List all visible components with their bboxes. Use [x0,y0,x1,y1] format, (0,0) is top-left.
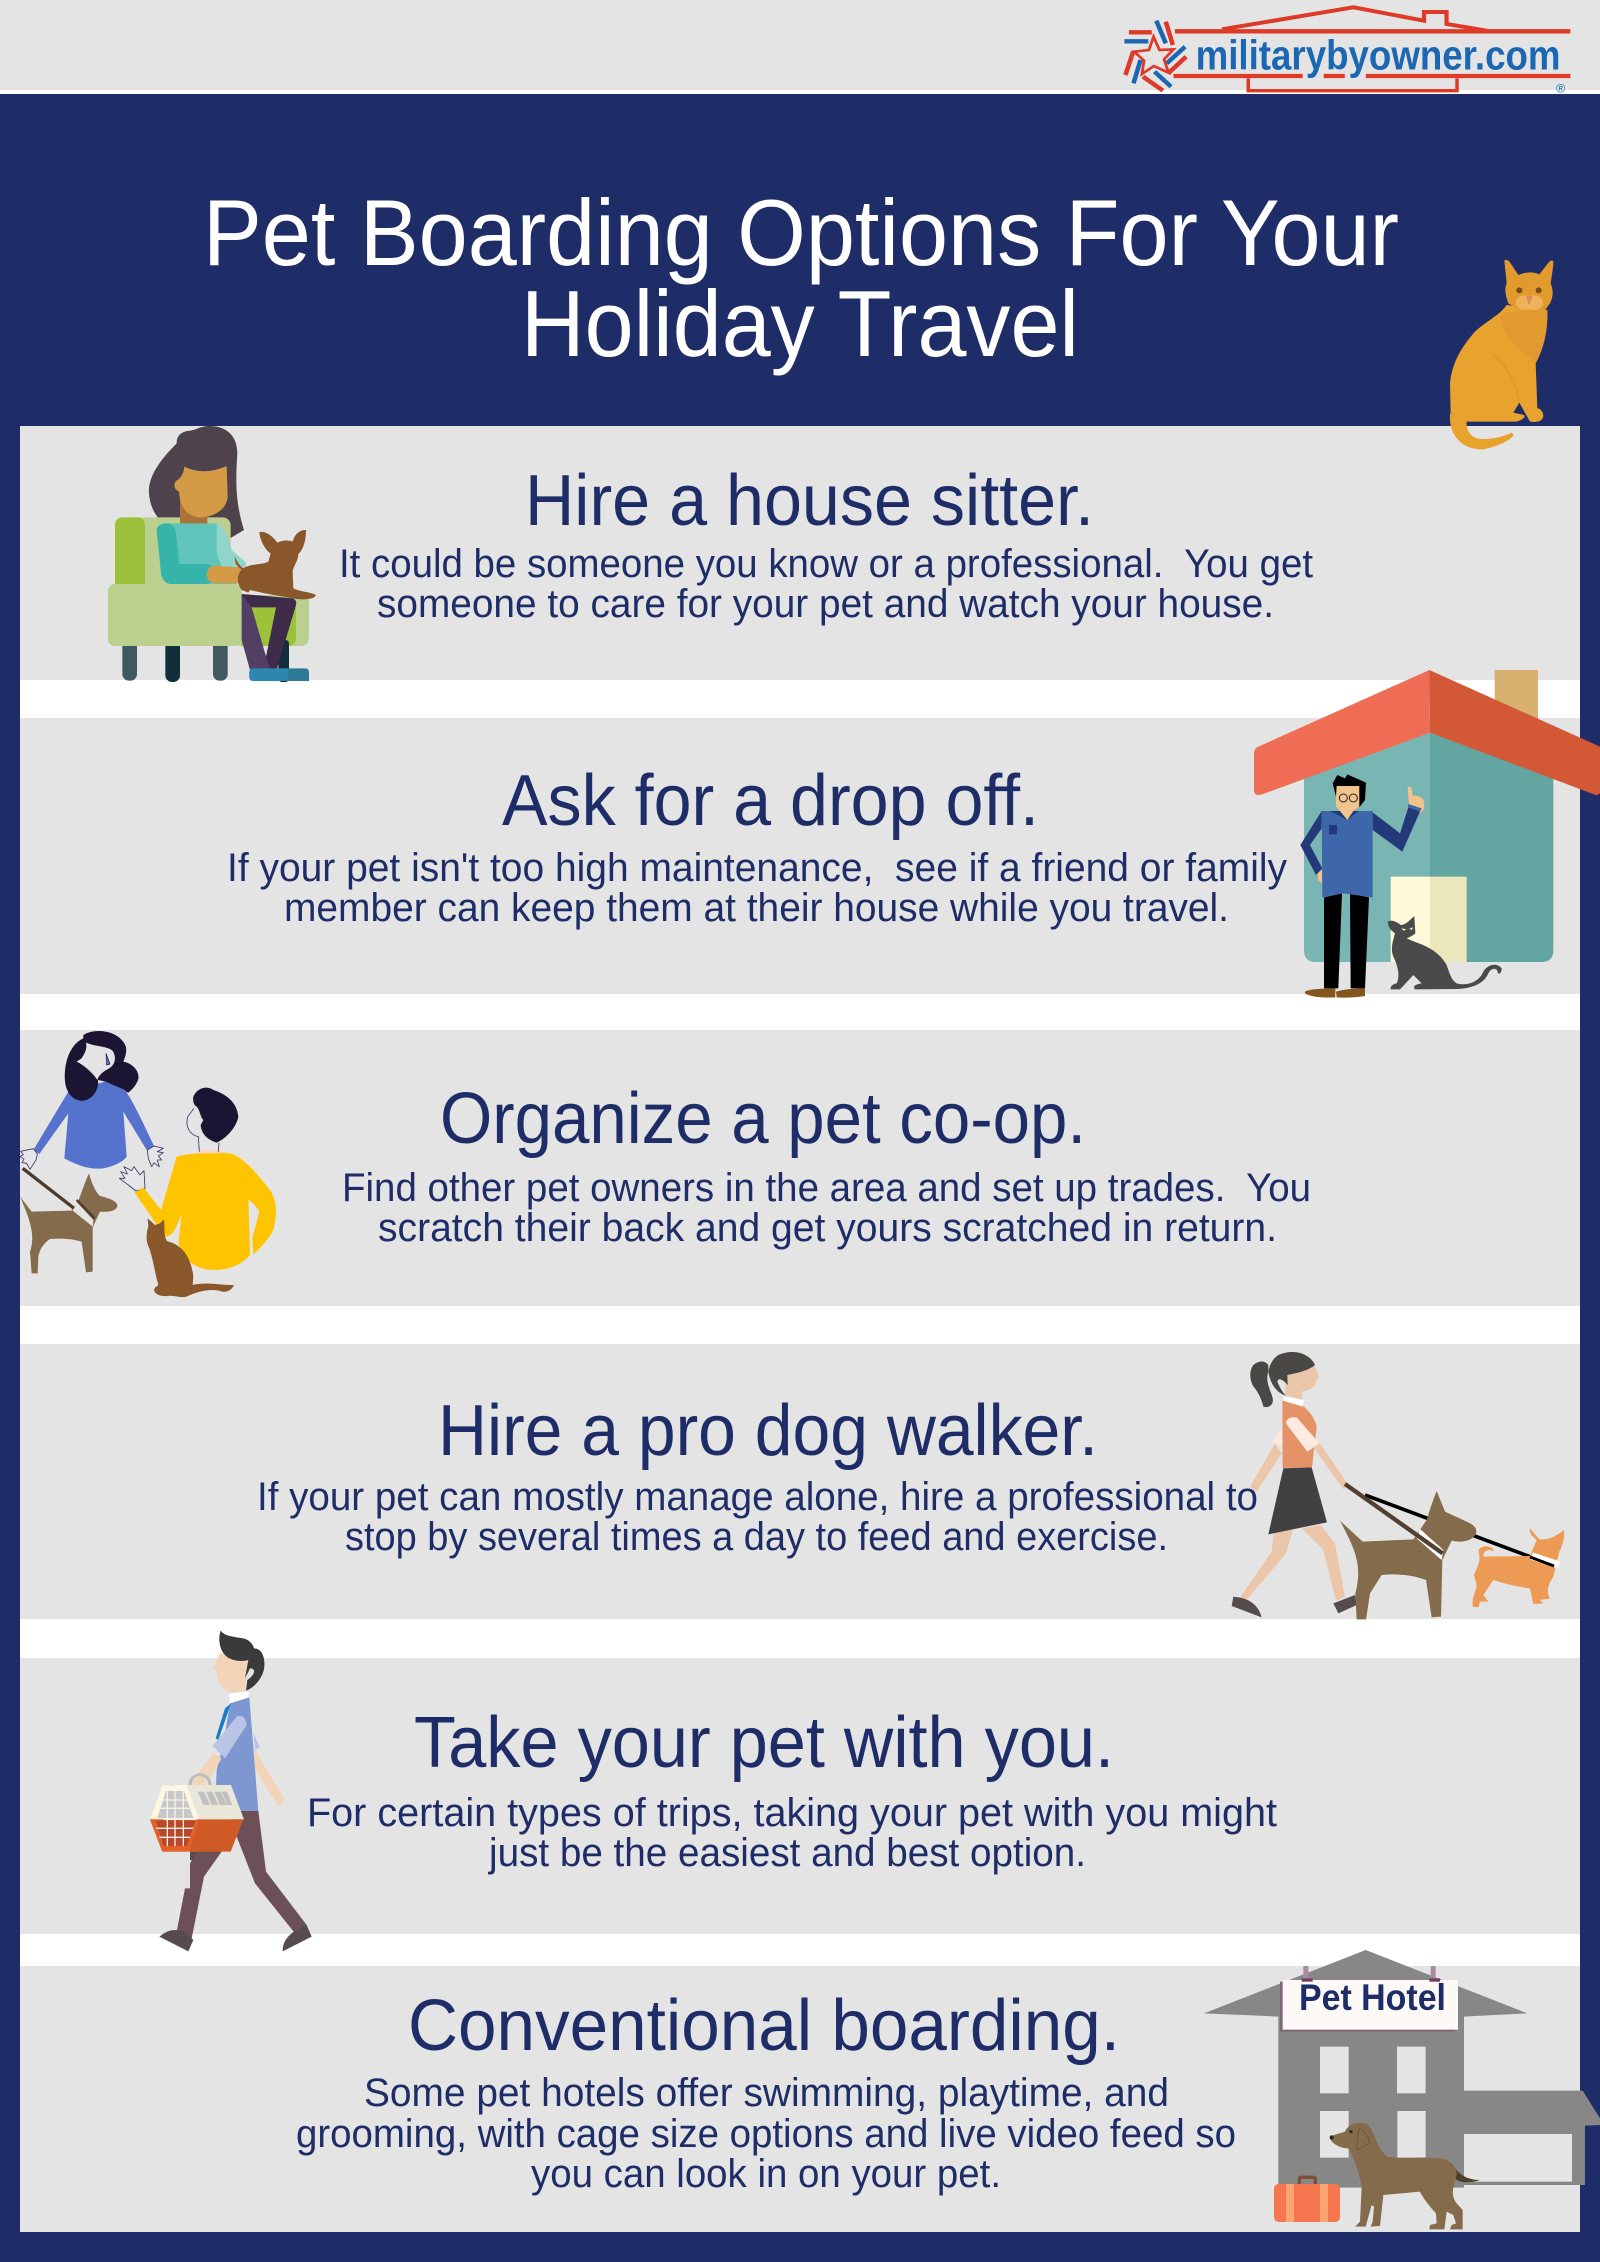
logo: militarybyowner.com: ® [1556,82,1565,96]
body text: co-op: scratch their back and get yours scratched in return. [378,1206,1277,1250]
panel: hire a house sitter [20,426,1580,682]
body text: co-op: Find other pet owners in the area and set up trades. You [342,1166,1311,1210]
icon: man and cat at house [1254,670,1600,998]
panel: take your pet with you [20,1631,1580,1951]
body text: boarding: grooming, with cage size options and live video feed so [296,2112,1236,2156]
title: Pet Boarding Options For Your [203,180,1399,285]
body text: dog walker: If your pet can mostly manage alone, hire a professional to [257,1475,1258,1519]
title: Holiday Travel [521,271,1079,376]
panel: ask for a drop off [20,670,1600,998]
white backing between panels [20,426,1580,2232]
body text: drop off: member can keep them at their house while you travel. [284,886,1229,930]
body text: house sitter: It could be someone you know or a professional. You get [339,542,1313,586]
body text: travel with pet: For certain types of trips, taking your pet with you might [307,1791,1277,1835]
panel: organize a pet co-op [20,1030,1580,1306]
heading: ask for a drop off: Ask for a drop off. [502,761,1039,841]
icon: woman walking two dogs [1232,1352,1564,1619]
body text: boarding [296,2071,1236,2196]
body text: boarding: Some pet hotels offer swimming, playtime, and [364,2071,1169,2115]
header strip [0,0,1600,94]
body text: dog walker [257,1475,1258,1559]
panel: conventional boarding [20,1950,1600,2232]
body text: drop off: If your pet isn't too high maintenance, see if a friend or family [227,846,1287,890]
body text: house sitter [339,542,1313,626]
body text: dog walker: stop by several times a day to feed and exercise. [345,1515,1168,1559]
title [203,180,1399,376]
heading: organize a pet co-op: Organize a pet co-op. [440,1079,1086,1159]
body text: travel with pet: just be the easiest and best option. [488,1831,1086,1875]
icon: pet hotel with dog and suitcase [1204,1950,1600,2229]
heading: conventional boarding: Conventional boarding. [408,1986,1120,2066]
panel: hire a pro dog walker [20,1344,1580,1619]
icon: man carrying pet crate [150,1631,312,1951]
icon: pet hotel with dog and suitcase: Pet Hotel [1299,1977,1446,2018]
heading: hire a house sitter: Hire a house sitter. [525,461,1094,541]
logo: militarybyowner.com [1124,7,1570,96]
sign: pet hotel [1283,1980,1458,2030]
body text: house sitter: someone to care for your pet and watch your house. [377,582,1274,626]
body text: co-op [342,1166,1311,1250]
heading: hire a pro dog walker: Hire a pro dog walker. [438,1391,1098,1471]
icon: two people with dog and cat [20,1031,276,1297]
icon: woman in armchair with dog [108,426,316,682]
body text: drop off [227,846,1287,930]
body text: boarding: you can look in on your pet. [531,2152,1001,2196]
heading: take your pet with you: Take your pet with you. [414,1703,1114,1783]
icon: orange cat [1450,260,1553,449]
body text: travel with pet [307,1791,1277,1875]
